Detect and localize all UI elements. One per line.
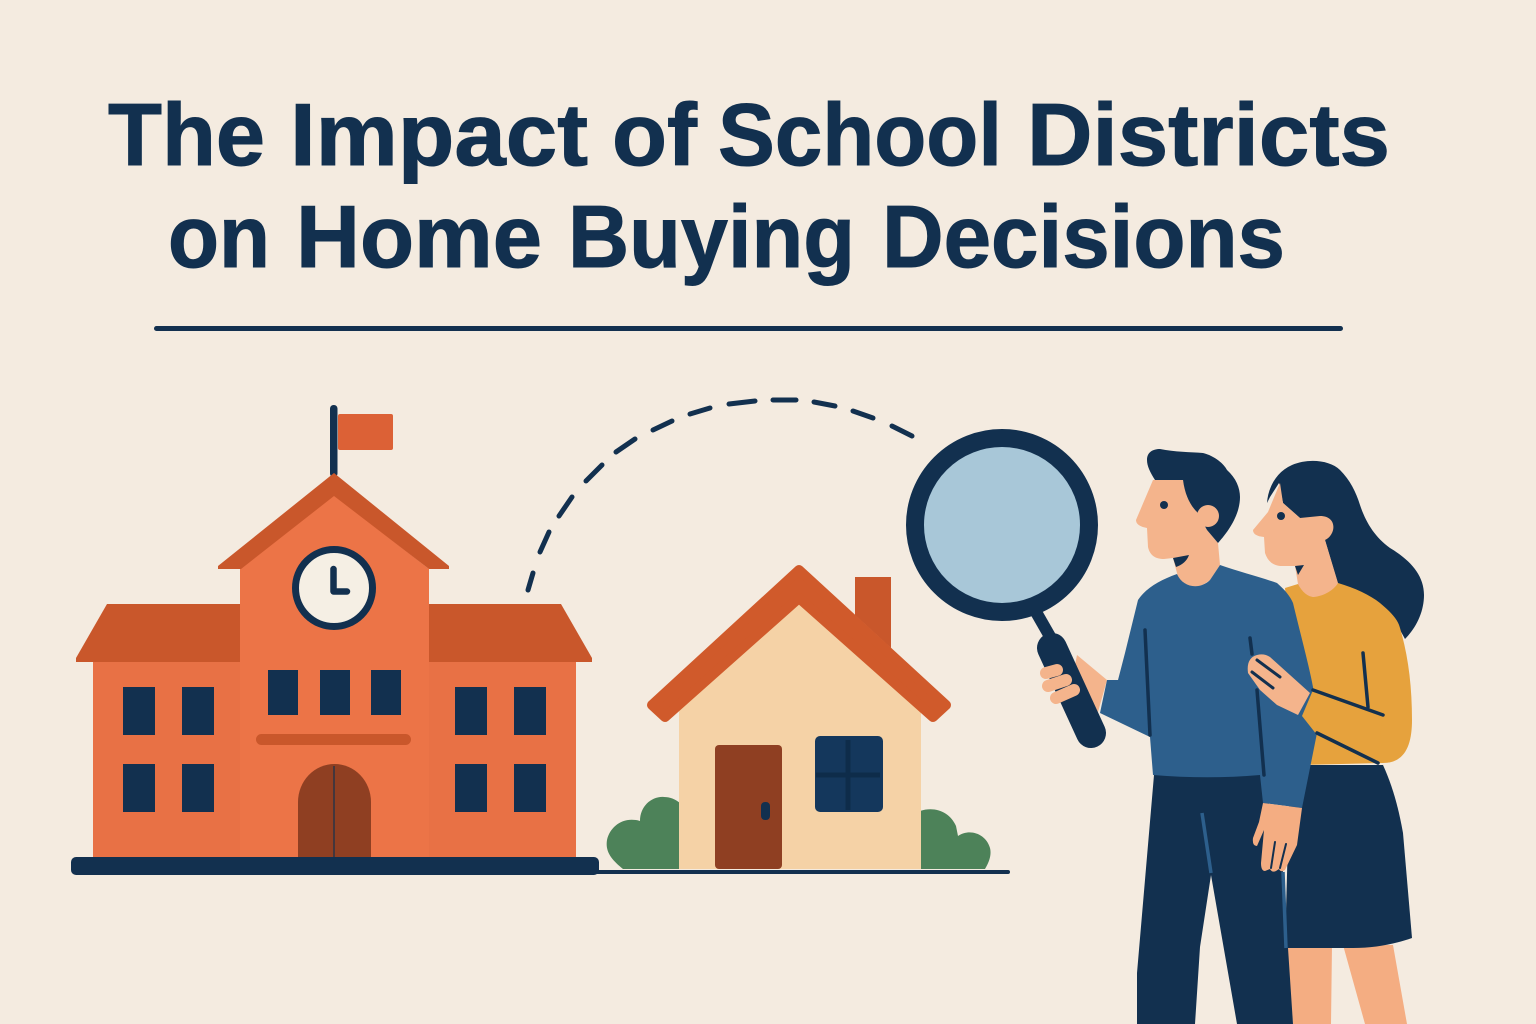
icon: dashed arc from school to magnifying glass bbox=[528, 400, 912, 590]
legs bbox=[1286, 945, 1407, 1024]
clock bbox=[296, 550, 372, 626]
man's lower hand bbox=[1253, 803, 1302, 872]
title: of bbox=[612, 85, 698, 184]
right wing bbox=[428, 604, 592, 858]
ear bbox=[1197, 505, 1219, 527]
title: School bbox=[718, 85, 1002, 184]
woman's forearm bbox=[1302, 690, 1383, 763]
person: woman bbox=[1253, 461, 1424, 1024]
flag bbox=[330, 405, 393, 477]
sweater bbox=[1100, 565, 1317, 808]
hair bbox=[1147, 449, 1240, 543]
icon: magnifying glass bbox=[915, 438, 1091, 733]
door bbox=[715, 745, 782, 869]
roof bbox=[652, 570, 946, 717]
ground line bbox=[590, 870, 1010, 874]
title: Decisions bbox=[882, 187, 1285, 286]
icon: school building bbox=[71, 405, 599, 875]
left wing bbox=[76, 604, 242, 858]
smile bbox=[1173, 555, 1189, 567]
skirt bbox=[1285, 765, 1412, 948]
hair bbox=[1267, 461, 1424, 639]
window bbox=[815, 736, 883, 812]
person: man bbox=[1070, 449, 1383, 1024]
man's fingers bbox=[1046, 670, 1074, 698]
chimney bbox=[855, 577, 891, 648]
icon: house bbox=[607, 570, 991, 869]
central tower bbox=[218, 473, 449, 858]
face and neck bbox=[1253, 483, 1338, 597]
title: Districts bbox=[1027, 85, 1390, 184]
title: Home bbox=[296, 187, 542, 286]
title: Buying bbox=[568, 187, 855, 286]
bushes bbox=[607, 797, 991, 869]
woman's hand on arm bbox=[1248, 654, 1310, 715]
title bbox=[108, 85, 1390, 286]
sweater fold lines bbox=[1145, 630, 1264, 775]
house body bbox=[679, 600, 921, 869]
trousers bbox=[1137, 775, 1293, 1024]
neck and face bbox=[1136, 480, 1220, 588]
man's wrist bbox=[1070, 655, 1107, 712]
sweater bbox=[1285, 583, 1412, 765]
title: Impact bbox=[290, 85, 588, 184]
title: on bbox=[168, 187, 270, 286]
title: The bbox=[108, 85, 265, 184]
